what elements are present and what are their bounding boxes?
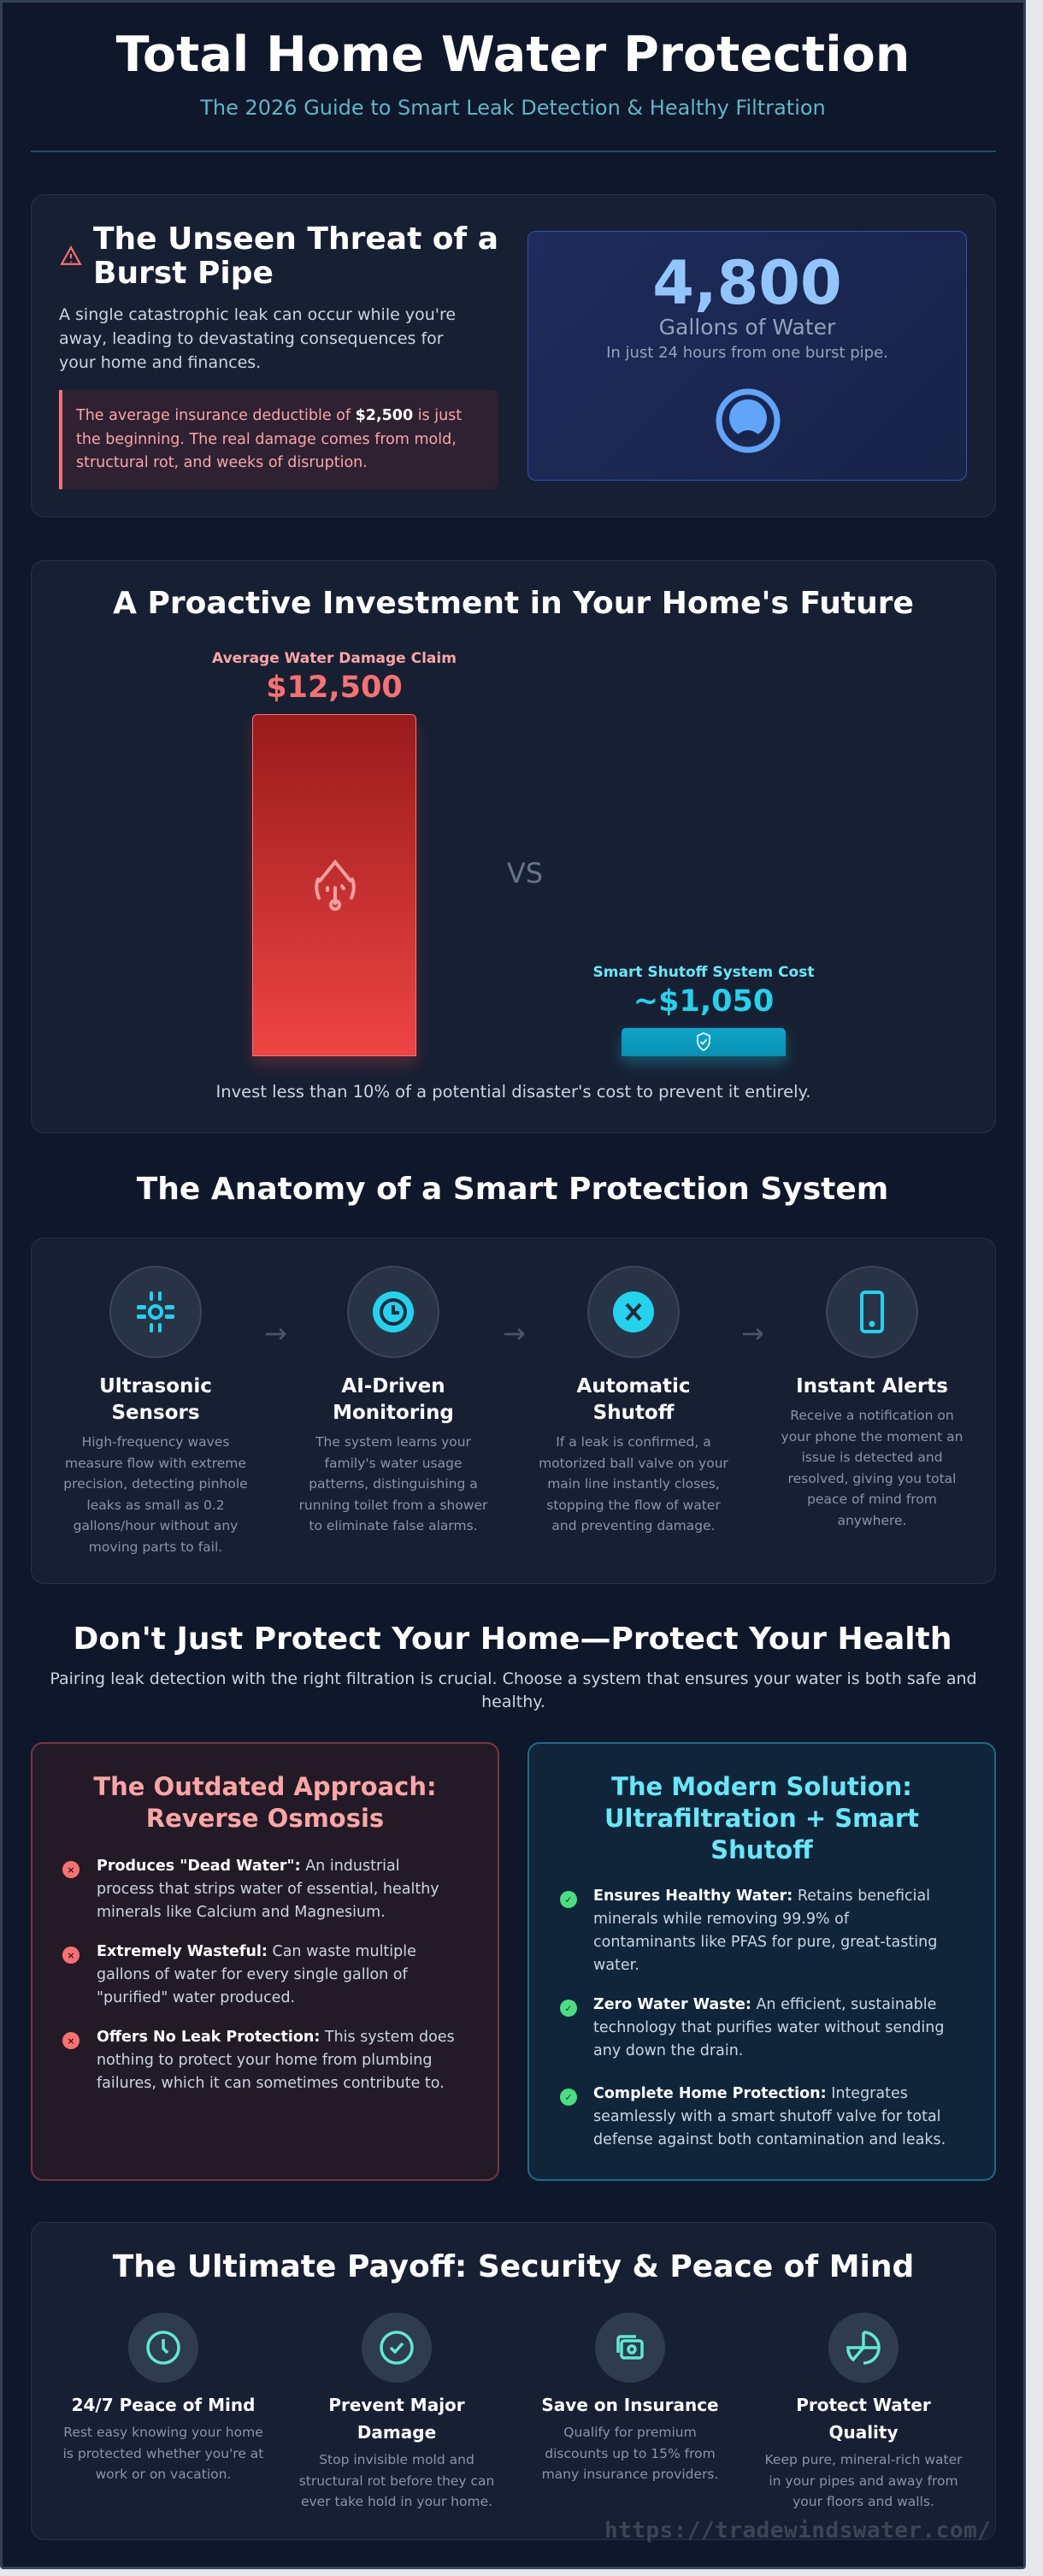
benefit: water quality: Quality [828, 2422, 899, 2443]
icon: sensor [109, 1266, 202, 1358]
item: complete protection [560, 2085, 946, 2148]
icon: money [595, 2313, 665, 2383]
benefit: water quality [765, 2313, 963, 2509]
panel: reverse osmosis: × [67, 1864, 75, 1875]
step: instant alerts: Instant Alerts [796, 1375, 948, 1397]
text: intro: A single catastrophic leak can occur while you're away, leading to devastating consequences for your home and finances. [59, 305, 456, 372]
panel: reverse osmosis: × [67, 2035, 75, 2046]
item: wasteful [62, 1943, 416, 2006]
icon: pie [828, 2313, 899, 2383]
bar: damage [252, 714, 416, 1056]
step: automatic shutoff [539, 1266, 728, 1533]
benefit: peace of mind [63, 2313, 263, 2482]
callout: deductible [59, 390, 498, 489]
heading: A Proactive Investment in Your Home's Future [113, 586, 914, 621]
heading: The Ultimate Payoff: Security & Peace of Mind [113, 2249, 914, 2284]
heading: outdated approach: Reverse Osmosis [146, 1804, 384, 1833]
text: VS: VS [507, 857, 543, 889]
caption: Invest less than 10% of a potential disaster's cost to prevent it entirely. [216, 1082, 810, 1102]
panel: burst pipe threat [31, 194, 996, 517]
panel: ultrafiltration: ✓ [564, 2092, 573, 2102]
panel: ultrafiltration: Zero Water Waste: An efficient, sustainable technology that purifies water without sending any down the drain. [593, 1996, 944, 2059]
benefit: insurance: Save on Insurance [541, 2395, 719, 2415]
item: healthy water [560, 1888, 937, 1974]
step: ultrasonic sensors: High-frequency waves measure flow with extreme precision, detecting pinhole leaks as small as 0.2 gallons/hour without any moving parts to fail. [63, 1434, 248, 1555]
benefit: water quality: Keep pure, mineral-rich water in your pipes and away from your floors and walls. [765, 2452, 962, 2509]
panel: ultrafiltration: ✓ [564, 2003, 573, 2013]
panel: reverse osmosis: × [67, 1950, 75, 1960]
step: AI monitoring [299, 1266, 487, 1533]
step: automatic shutoff: Automatic [577, 1375, 690, 1397]
heading: modern solution: Shutoff [710, 1835, 813, 1864]
step: ultrasonic sensors [63, 1266, 248, 1555]
heading: unseen threat: The Unseen Threat of a Burst Pipe [93, 222, 498, 291]
subtitle: The 2026 Guide to Smart Leak Detection & Healthy Filtration [200, 96, 826, 120]
heading: outdated approach: The Outdated Approach: [93, 1772, 437, 1801]
panel: anatomy steps [31, 1238, 996, 1584]
benefit: insurance: Qualify for premium discounts up to 15% from many insurance providers. [542, 2425, 718, 2482]
benefit: prevent damage: Damage [357, 2422, 436, 2443]
step: ultrasonic sensors: Ultrasonic [99, 1375, 212, 1397]
step: automatic shutoff: Shutoff [593, 1402, 674, 1424]
benefit: prevent damage: Prevent Major [328, 2395, 465, 2415]
watermark: url: https://tradewindswater.com/ [604, 2518, 991, 2544]
step: AI monitoring: The system learns your family's water usage patterns, distinguishing a running toilet from a shower to eliminate false alarms. [299, 1434, 487, 1533]
item: dead water [62, 1858, 439, 1921]
label: shutoff cost: Smart Shutoff System Cost [593, 964, 814, 981]
panel: reverse osmosis: Produces "Dead Water": An industrial process that strips water of essential, healthy minerals like Calcium and Magnesium. [97, 1858, 439, 1921]
panel: ultimate payoff [31, 2222, 996, 2540]
icon: broken house [315, 860, 356, 911]
panel: reverse osmosis: Extremely Wasteful: Can waste multiple gallons of water for every single gallon of "purified" water produced. [97, 1943, 416, 2006]
benefit: insurance [541, 2313, 719, 2482]
heading: health: Don't Just Protect Your Home—Protect Your Health [74, 1622, 952, 1657]
heading: outdated approach [93, 1772, 437, 1833]
icon: shutoff x [587, 1266, 680, 1358]
panel: reverse osmosis: Offers No Leak Protection: This system does nothing to protect your home from plumbing failures, which it can sometimes contribute to. [97, 2029, 455, 2092]
heading: anatomy: The Anatomy of a Smart Protection System [137, 1172, 888, 1207]
step: AI monitoring: Monitoring [333, 1402, 454, 1424]
icon: clock [128, 2313, 198, 2383]
benefit: prevent damage: Stop invisible mold and structural rot before they can ever take hold in your home. [299, 2452, 494, 2509]
stat box: 4,800 gallons: In just 24 hours from one burst pipe. [606, 344, 888, 362]
icon: AI dial [347, 1266, 439, 1358]
panel: ultrafiltration: Complete Home Protection: Integrates seamlessly with a smart shutoff valve for total defense against both contamination and leaks. [593, 2085, 946, 2148]
item: no leak protection [62, 2029, 455, 2092]
step: automatic shutoff: If a leak is confirmed, a motorized ball valve on your main line instantly closes, stopping the flow of water and preventing damage. [539, 1434, 728, 1533]
icon: phone [826, 1266, 918, 1358]
arrow: → [503, 1317, 526, 1350]
panel: reverse osmosis [31, 1742, 499, 2181]
heading: modern solution: Ultrafiltration + Smart [604, 1804, 919, 1833]
step: instant alerts [781, 1266, 963, 1527]
panel: ultrafiltration [527, 1742, 996, 2181]
stat box: 4,800 gallons [527, 231, 967, 481]
icon: warning [60, 245, 82, 265]
item: zero waste [560, 1996, 944, 2059]
label: damage claim: Average Water Damage Claim [212, 650, 457, 667]
icon: shield [697, 1031, 710, 1052]
icon: check circle [362, 2313, 432, 2383]
callout: deductible: The average insurance deductible of $2,500 is just the beginning. The real damage comes from mold, structural rot, and weeks of disruption. [76, 407, 462, 471]
value: 12,500: $12,500 [266, 671, 403, 705]
title: Total Home Water Protection [116, 27, 910, 83]
arrow: → [741, 1317, 764, 1350]
benefit: peace of mind: 24/7 Peace of Mind [72, 2395, 255, 2415]
arrow: → [264, 1317, 287, 1350]
text: health intro: Pairing leak detection with the right filtration is crucial. Choose a system that ensures your water is both safe and healthy. [50, 1669, 977, 1711]
heading: modern solution: The Modern Solution: [611, 1772, 912, 1801]
benefit: water quality: Protect Water [796, 2395, 931, 2415]
icon: water drop circle [716, 388, 780, 453]
benefit: peace of mind: Rest easy knowing your home is protected whether you're at work or on vacation. [63, 2425, 263, 2482]
step: ultrasonic sensors: Sensors [111, 1402, 200, 1424]
panel: ultrafiltration: Ensures Healthy Water: Retains beneficial minerals while removing 99.9% of contaminants like PFAS for pure, great-tasting water. [593, 1888, 937, 1974]
heading: modern solution [604, 1772, 919, 1864]
stat box: 4,800 gallons: 4,800 [652, 248, 842, 318]
bar: shutoff [622, 1028, 786, 1056]
step: instant alerts: Receive a notification on your phone the moment an issue is detected and resolved, giving you total peace of mind from anywhere. [781, 1408, 963, 1527]
panel: investment comparison [31, 560, 996, 1133]
benefit: prevent damage [299, 2313, 494, 2509]
stat box: 4,800 gallons: Gallons of Water [659, 315, 835, 340]
value: 1,050: ~$1,050 [633, 984, 774, 1019]
panel: ultrafiltration: ✓ [564, 1894, 573, 1905]
step: AI monitoring: AI-Driven [341, 1375, 445, 1397]
